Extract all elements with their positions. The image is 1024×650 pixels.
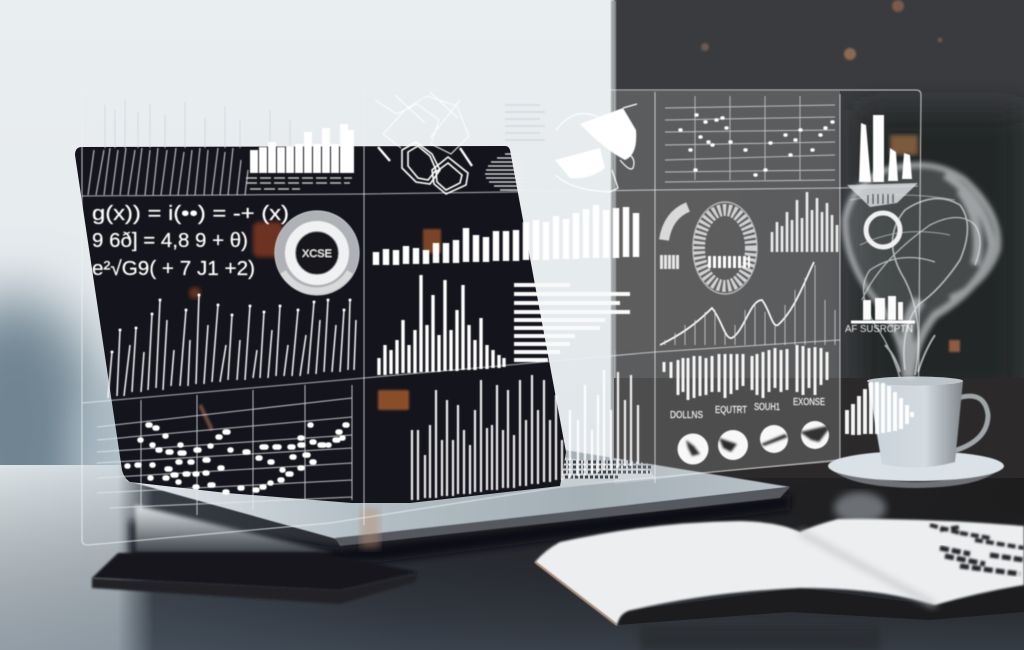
formulas: 9 6ð] = 4,8 9 + θ)	[92, 230, 248, 252]
chart: striped semicircle	[485, 105, 545, 190]
glass overlay panel	[614, 91, 840, 484]
laptop screen	[75, 146, 566, 503]
small captions: SOUH1	[754, 402, 780, 413]
laptop base	[124, 450, 790, 548]
formulas: e²√G9( + 7 J1 +2)	[92, 258, 255, 280]
holographic charts	[82, 90, 921, 545]
chart: hanging bars	[664, 345, 827, 400]
top-right icons: AF SUSRCPTN	[845, 324, 913, 335]
laptop shadow and reflection	[130, 494, 790, 562]
chart: gauge-side bars	[772, 192, 837, 252]
steam	[845, 163, 998, 380]
chart: line chart	[660, 262, 835, 345]
pie icons	[678, 421, 829, 464]
small captions: DOLLNS	[670, 410, 703, 421]
chart: horizontal bars	[514, 285, 630, 360]
panel outline and dividers	[82, 90, 921, 545]
chart: segmented gauge	[660, 202, 757, 294]
chart: bottom centre spikes	[412, 370, 638, 500]
donut chart	[280, 216, 354, 291]
chart: triangle bars on cup	[847, 382, 912, 435]
chart: top-left bars	[246, 124, 352, 189]
small captions: EXONSE	[793, 397, 825, 408]
formulas: g(x)) = i(••) = -+ (x)	[92, 203, 289, 225]
top-right icons	[845, 115, 918, 335]
saucer	[828, 451, 1004, 488]
phone	[92, 553, 418, 604]
chart: top-left spikes	[88, 148, 248, 195]
chart: large left spikes	[108, 295, 356, 398]
diagram: wedge shapes	[555, 104, 637, 192]
chart: centre histogram	[379, 275, 504, 375]
chart: faint spikes on wall	[105, 100, 290, 148]
chart: centre bars	[376, 205, 636, 265]
chart: top-right scatter	[665, 96, 835, 182]
chart: scatter left	[97, 385, 352, 515]
small captions: EQUTRT	[715, 405, 747, 416]
diagram: hexagon network	[375, 92, 472, 194]
open book	[535, 519, 1024, 625]
formulas	[92, 203, 289, 280]
desk	[0, 378, 1024, 650]
coffee cup	[867, 376, 988, 468]
donut chart: XCSE	[302, 248, 332, 260]
wall background	[0, 0, 1024, 465]
small captions	[670, 397, 825, 421]
